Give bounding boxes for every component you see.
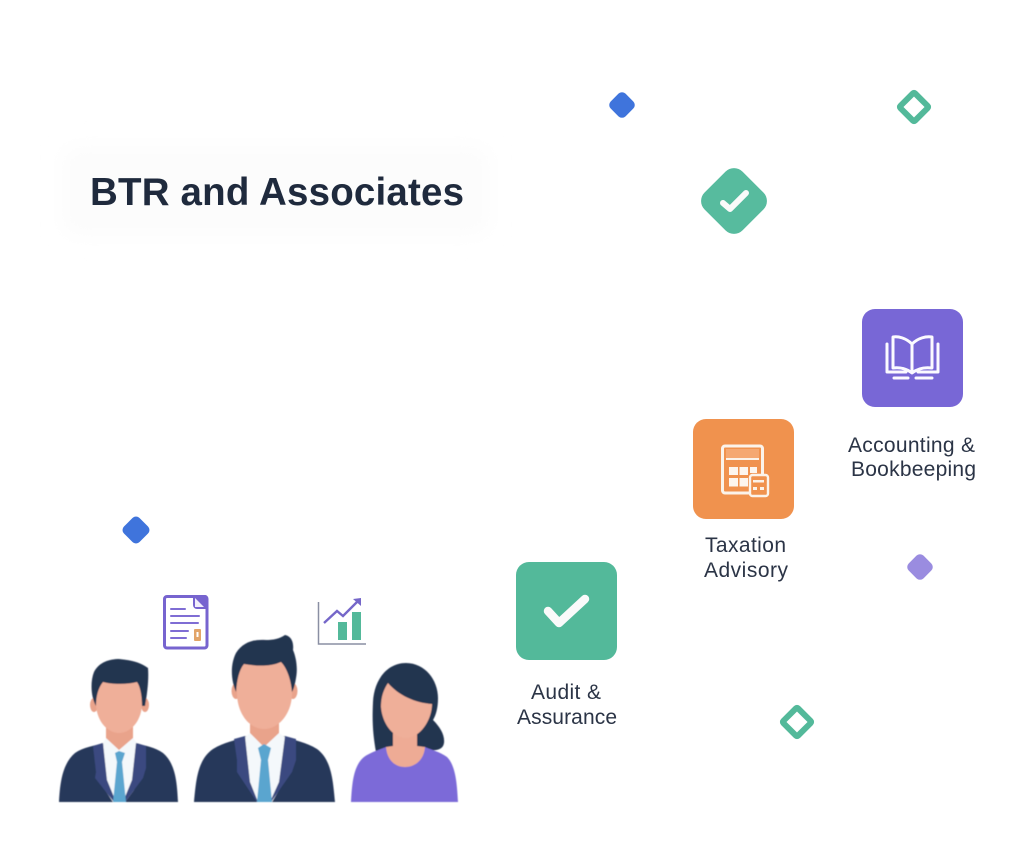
title: BTR and Associates [90,171,464,214]
neck and chest [386,725,425,767]
face [237,655,292,729]
face [96,675,142,733]
hair [92,659,148,706]
hair back [373,663,444,752]
tie [257,744,272,802]
icon: document [164,595,208,648]
icon: blue diamond top [607,90,637,120]
shirt [103,738,137,802]
ears [232,683,240,699]
lapels [234,736,258,802]
icon: purple diamond [905,552,935,582]
icon: blue diamond left [120,514,152,546]
shirt [245,733,285,802]
icon: green outlined diamond top right [899,92,929,122]
label: audit: Assurance [517,706,617,729]
label: taxation: Taxation [705,534,786,557]
lapels [93,743,116,802]
icon: green outlined diamond bottom [782,707,812,737]
body [351,747,458,802]
person: woman [351,663,458,802]
icon: calculator tile [693,419,794,519]
icon: check tile [516,562,617,660]
hair [232,635,297,692]
title [62,146,490,236]
person: left man [59,659,178,802]
icon: growth chart [318,598,366,644]
body [194,736,335,802]
tie [113,751,126,802]
label: accounting: Accounting & [848,434,975,457]
icon: book tile [862,309,963,407]
neck [106,722,133,752]
person: centre man [194,635,335,802]
face [381,683,432,738]
icon: green check diamond [696,163,772,239]
panel: taxation advisory [693,419,794,582]
body [59,743,178,802]
panel: audit and assurance [516,562,617,729]
ears [90,698,98,712]
label: accounting: Bookbeeping [851,458,976,481]
label: taxation: Advisory [704,559,788,582]
panel: accounting and bookkeeping [848,309,981,481]
neck [250,715,279,752]
label: audit: Audit & [531,681,601,704]
